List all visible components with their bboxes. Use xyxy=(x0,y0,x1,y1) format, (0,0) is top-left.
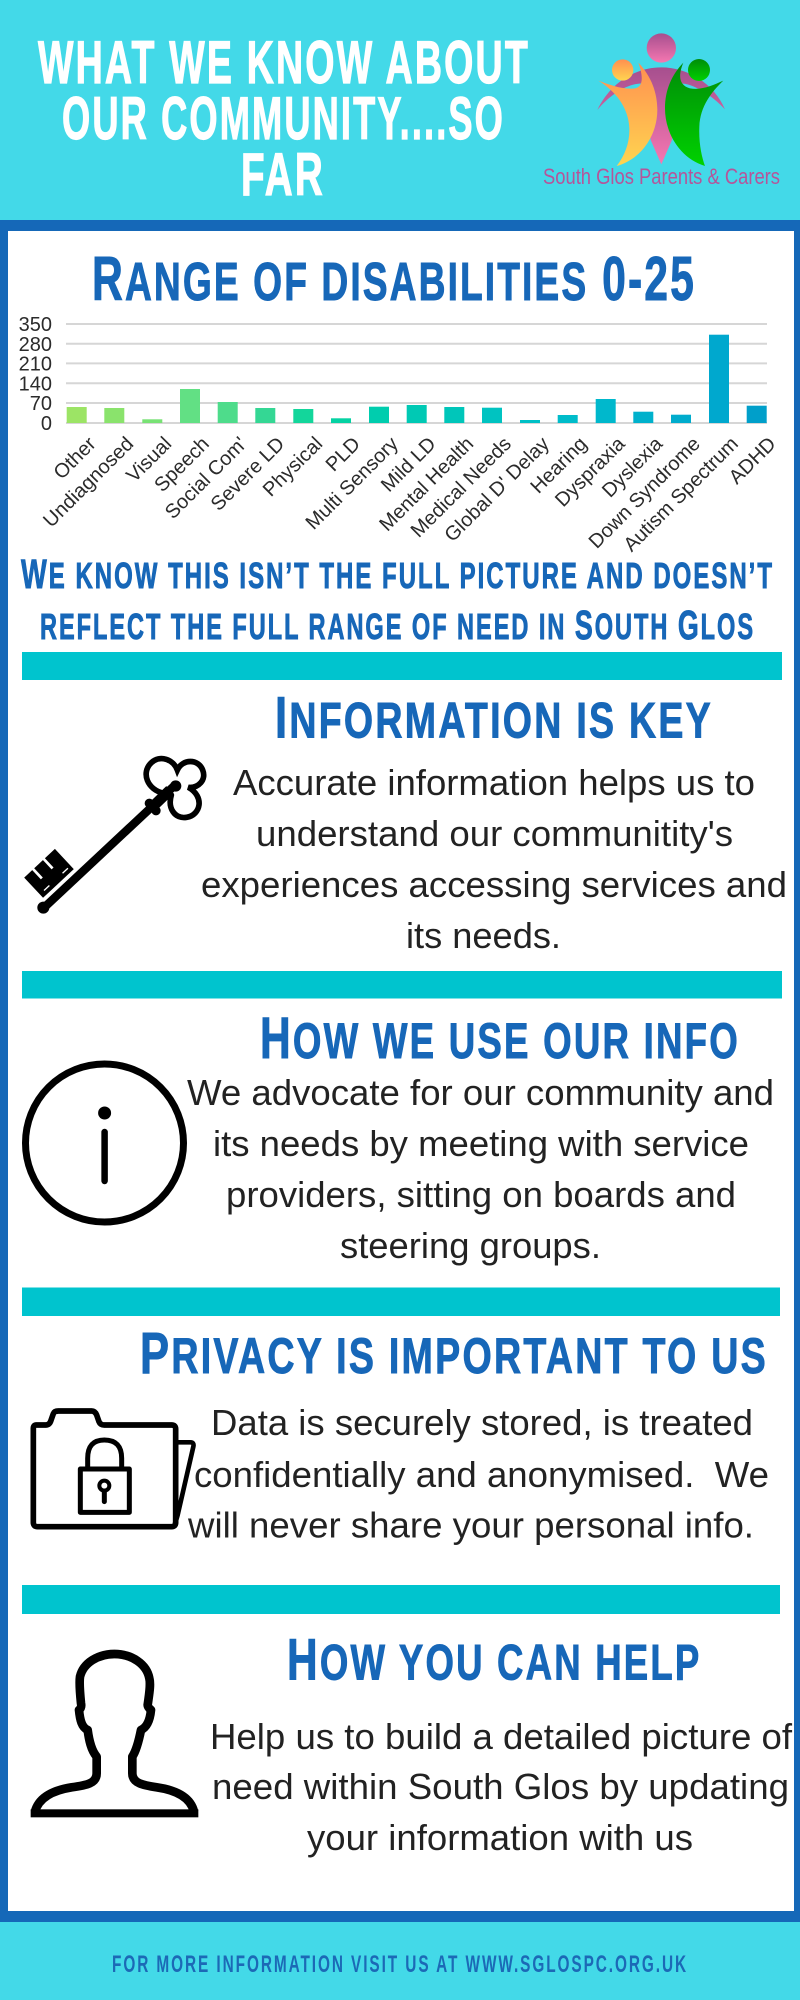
x axis labels: Undiagnosed xyxy=(39,433,138,532)
body text: need within South Glos by updating xyxy=(212,1766,789,1807)
body text: steering groups. xyxy=(340,1225,601,1266)
body text: its needs. xyxy=(406,915,561,956)
section: how we use our info xyxy=(26,1006,774,1266)
x axis labels: Dyslexia xyxy=(598,432,668,502)
bar chart: range of disabilities xyxy=(19,314,781,556)
body text: its needs by meeting with service xyxy=(213,1123,749,1164)
divider bar 1 xyxy=(22,652,782,680)
body text: Accurate information helps us to xyxy=(233,762,755,803)
x axis labels: Global D' Delay xyxy=(440,433,554,546)
section: how you can help xyxy=(31,1628,793,1858)
body text: experiences accessing services and xyxy=(201,864,787,905)
body text xyxy=(201,762,787,956)
bars xyxy=(67,335,767,423)
x axis labels: Autism Spectrum xyxy=(620,433,743,556)
section: privacy xyxy=(33,1321,769,1546)
divider bar 2 xyxy=(22,971,782,998)
y axis labels: 0 xyxy=(41,413,52,435)
body text: Help us to build a detailed picture of xyxy=(210,1716,793,1757)
x axis labels: Severe LD xyxy=(207,433,289,515)
x axis labels: Down Syndrome xyxy=(585,433,705,553)
x axis labels: ADHD xyxy=(725,433,781,489)
x axis labels: Other xyxy=(50,433,101,484)
body text xyxy=(187,1072,774,1266)
y axis labels: 210 xyxy=(19,354,52,376)
section: information is key xyxy=(24,686,787,956)
x axis labels: Mild LD xyxy=(377,433,441,496)
divider bar 4 xyxy=(22,1585,780,1614)
title: FAR xyxy=(241,141,325,208)
y axis labels: 350 xyxy=(19,314,52,336)
body text: providers, sitting on boards and xyxy=(226,1174,736,1215)
icon: person silhouette xyxy=(31,1654,198,1817)
x axis labels: Physical xyxy=(259,433,327,501)
body text xyxy=(187,1402,769,1546)
body text: We advocate for our community and xyxy=(187,1072,774,1113)
x axis labels: Mental Health xyxy=(375,433,478,536)
icon: information circle xyxy=(26,1064,184,1222)
y axis labels: 70 xyxy=(30,393,52,415)
header band xyxy=(0,0,800,220)
body text: confidentially and anonymised. We xyxy=(194,1454,769,1495)
title: OUR COMMUNITY....SO xyxy=(62,85,505,152)
divider bar 3 xyxy=(22,1288,780,1316)
x axis labels xyxy=(39,432,781,556)
body text: will never share your personal info. xyxy=(187,1504,754,1546)
logo: South Glos Parents & Carers xyxy=(543,33,780,189)
x axis labels: Multi Sensory xyxy=(302,433,403,534)
heading: range of disabilities: RANGE OF DISABILITIES 0-25 xyxy=(92,245,696,314)
body text: Data is securely stored, is treated xyxy=(211,1402,753,1443)
x axis labels: Social Com' xyxy=(161,433,252,524)
footer band xyxy=(0,1922,800,2000)
icon: locked folder xyxy=(33,1411,194,1527)
x axis labels: PLD xyxy=(322,433,365,476)
x axis labels: Medical Needs xyxy=(407,433,516,542)
icon: key xyxy=(24,759,204,914)
title xyxy=(38,29,530,208)
body text xyxy=(210,1716,793,1858)
y axis labels xyxy=(19,314,52,435)
y axis labels: 280 xyxy=(19,334,52,356)
body text: your information with us xyxy=(307,1817,693,1858)
x axis labels: Hearing xyxy=(526,433,592,498)
note: not the full picture xyxy=(21,551,774,648)
x axis labels: Dyspraxia xyxy=(551,432,630,511)
x axis labels: Visual xyxy=(122,433,176,487)
y axis labels: 140 xyxy=(19,374,52,396)
x axis labels: Speech xyxy=(150,433,214,497)
body text: understand our communitity's xyxy=(256,813,733,854)
